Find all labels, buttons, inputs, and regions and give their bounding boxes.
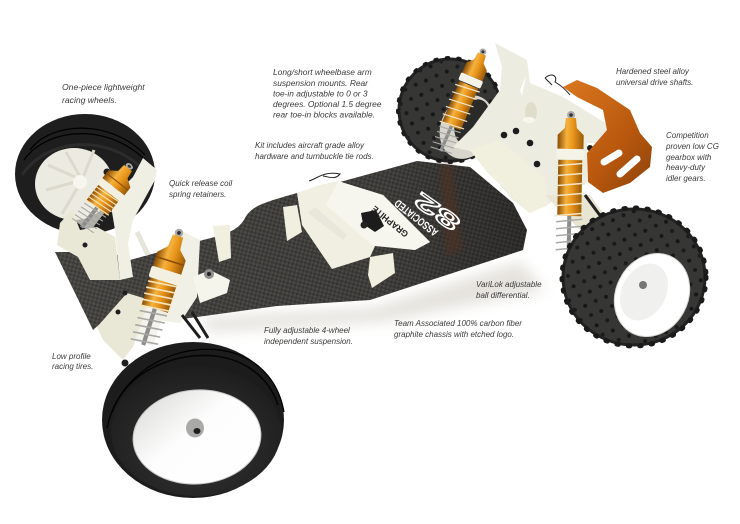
label: gearbox: Competition xyxy=(666,131,709,140)
coppery reflection xyxy=(440,165,462,256)
label: drive shafts: Hardened steel alloy xyxy=(616,67,690,76)
arm screws xyxy=(104,168,110,176)
label: racing tires: racing tires. xyxy=(52,362,93,371)
label: coil spring retainers: spring retainers. xyxy=(169,190,226,199)
label: wheelbase mounts: suspension mounts. Rear xyxy=(273,78,369,88)
label: wheelbase mounts: toe-in adjustable to 0 or 3 xyxy=(273,88,368,98)
label: kit hardware: Kit includes aircraft grade alloy xyxy=(255,141,365,150)
axle nut xyxy=(186,418,204,438)
inner rim xyxy=(429,86,505,168)
plate cut-outs xyxy=(525,102,537,122)
tray top xyxy=(326,181,430,250)
label: wheelbase mounts: Long/short wheelbase arm xyxy=(273,67,372,77)
left carrier xyxy=(57,210,120,280)
screw holes xyxy=(501,132,507,138)
graphite label: GRAPHITE xyxy=(370,204,410,239)
rear bulkhead and tower xyxy=(453,43,612,240)
recess xyxy=(308,207,347,240)
lower gearbox block xyxy=(470,140,548,213)
logo numerals: 82 xyxy=(410,187,465,236)
dished white hub xyxy=(600,240,704,350)
label: gearbox: gearbox with xyxy=(666,153,712,162)
front-right wheel xyxy=(102,342,284,498)
label: ball differential: VariLok adjustable xyxy=(476,280,542,289)
gearbox clip xyxy=(545,75,570,95)
label: kit hardware: hardware and turnbuckle tie rods. xyxy=(255,152,374,161)
gearbox white plate xyxy=(453,43,612,213)
tire with nubs xyxy=(563,209,705,345)
front-right shock xyxy=(128,224,195,350)
label: ball differential: ball differential. xyxy=(476,291,530,300)
label: coil spring retainers: Quick release coil xyxy=(169,179,232,188)
etched logo xyxy=(392,187,465,238)
front-left wheel xyxy=(15,114,155,234)
label: wheelbase mounts: degrees. Optional 1.5 degree xyxy=(273,99,382,109)
carbon chassis xyxy=(55,161,527,330)
rear-left wheel xyxy=(398,58,505,168)
tire xyxy=(102,342,284,498)
rear-left shock xyxy=(429,44,496,156)
label: carbon chassis: Team Associated 100% carbon fiber xyxy=(394,319,522,328)
guard slots xyxy=(604,153,619,162)
label: drive shafts: universal drive shafts. xyxy=(616,78,693,87)
lower carrier xyxy=(97,293,150,360)
tread ribs xyxy=(24,128,150,165)
front suspension xyxy=(57,158,230,366)
label: gearbox: proven low CG xyxy=(665,142,719,151)
tire with nubs xyxy=(399,59,501,161)
black logo mark xyxy=(361,210,384,232)
mounting screw xyxy=(360,222,368,228)
label: independent suspension: independent suspension. xyxy=(264,337,353,346)
tire xyxy=(15,114,155,234)
label: independent suspension: Fully adjustable 4-wheel xyxy=(264,326,350,335)
bulkhead xyxy=(193,270,230,303)
chassis blocks xyxy=(213,205,395,288)
shock tower xyxy=(150,230,200,323)
box body xyxy=(297,181,430,269)
bulkhead bolt xyxy=(204,269,214,279)
logo wordmark: ASSOCIATED xyxy=(392,197,441,238)
turnbuckle links xyxy=(182,312,208,338)
rear-right shock xyxy=(554,111,586,250)
ground shadow xyxy=(200,262,545,332)
label: gearbox: idler gears. xyxy=(666,174,706,183)
orange gearbox guard xyxy=(563,80,652,193)
body clip xyxy=(309,173,340,181)
battery box xyxy=(297,173,430,269)
curved plate xyxy=(110,158,157,280)
spoked rim xyxy=(35,148,113,220)
label: one-piece wheels: racing wheels. xyxy=(62,95,117,105)
label: carbon chassis: graphite chassis with etched logo. xyxy=(394,330,514,339)
label: gearbox: heavy-duty xyxy=(666,163,706,172)
front-left shock xyxy=(70,155,143,237)
label: one-piece wheels: One-piece lightweight xyxy=(62,82,145,92)
label: racing tires: Low profile xyxy=(52,352,91,361)
label: wheelbase mounts: rear toe-in blocks available. xyxy=(273,110,375,120)
tread ribs xyxy=(112,355,278,412)
tire sidewall xyxy=(111,366,281,496)
rear-right wheel xyxy=(562,208,706,350)
rear post xyxy=(368,253,395,288)
white hub xyxy=(130,386,264,488)
lower arm xyxy=(545,195,612,240)
axle nut xyxy=(639,281,647,289)
